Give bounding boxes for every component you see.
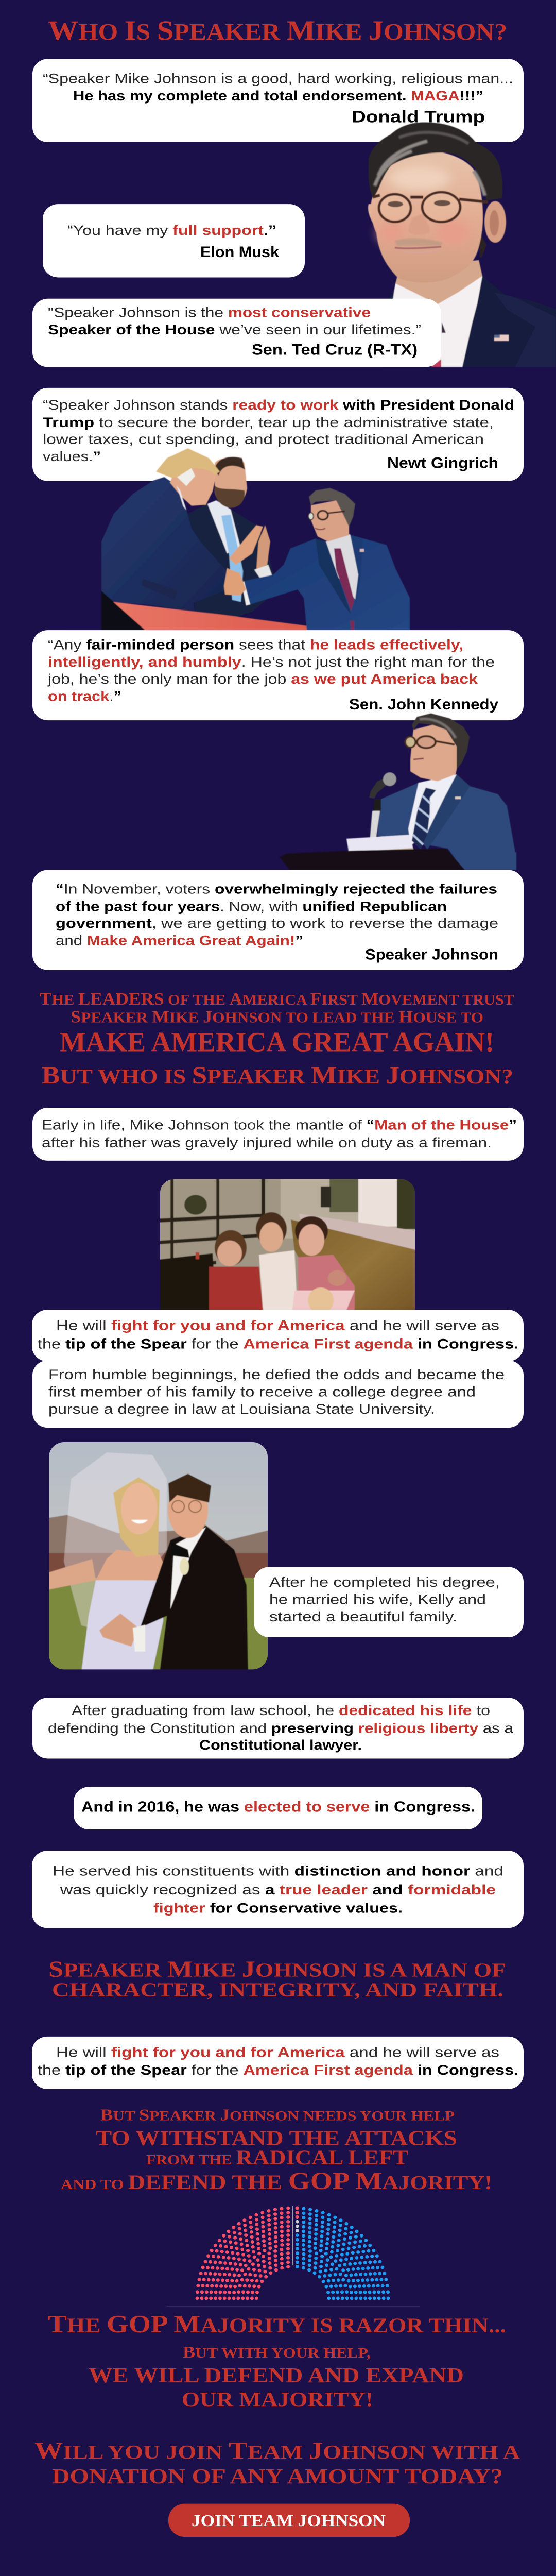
- heading: man of character: CHARACTER, INTEGRITY, AND FAITH.: [52, 1978, 503, 2001]
- button: join team johnson: [168, 2504, 410, 2537]
- panel: Ted Cruz quote: [32, 299, 441, 367]
- panel: fight for you text repeated: [32, 2037, 524, 2089]
- panel: law school text: [32, 1698, 524, 1758]
- heading: leaders of the America First Movement: BUT WHO IS SPEAKER MIKE JOHNSON?: [42, 1061, 513, 1089]
- heading: majority is razor thin: BUT WITH YOUR HELP,: [183, 2344, 371, 2362]
- panel: fight for you text: He will fight for you and for America and he will serve as: [56, 1317, 499, 1333]
- panel: Donald Trump quote: “Speaker Mike Johnson is a good, hard working, religious man...: [43, 71, 513, 86]
- panel: Sen. John Kennedy quote: intelligently, and humbly . He’s not just the right man for the: [48, 654, 495, 670]
- photo: Speaker Johnson portrait: [368, 122, 556, 367]
- photo: childhood family: [160, 1179, 415, 1310]
- panel: Ted Cruz quote: Speaker of the House we’ve seen in our lifetimes.”: [48, 322, 421, 337]
- panel: Speaker Johnson quote: government , we are getting to work to reverse the damage: [56, 915, 498, 931]
- panel: Speaker Johnson quote: Speaker Johnson: [365, 946, 498, 963]
- panel: Newt Gingrich quote: lower taxes, cut spending, and protect traditional American: [43, 431, 484, 447]
- panel: Donald Trump quote: Donald Trump: [352, 108, 485, 126]
- panel: Ted Cruz quote: Sen. Ted Cruz (R-TX): [252, 341, 418, 358]
- heading: leaders of the America First Movement: THE LEADERS OF THE AMERICA FIRST MOVEMENT TRUST: [40, 990, 514, 1009]
- panel: fight for you text repeated: the tip of the Spear for the America First agenda in Congress.: [38, 2062, 518, 2078]
- heading: majority is razor thin: WE WILL DEFEND AND EXPAND: [89, 2364, 464, 2387]
- heading: majority is razor thin: THE GOP M AJORITY IS RAZOR THIN...: [48, 2310, 506, 2338]
- panel: humble beginnings text: [32, 1360, 524, 1428]
- photo: wedding: [46, 1439, 271, 1672]
- panel: Newt Gingrich quote: “Speaker Johnson stands ready to work with President Donald: [43, 397, 514, 413]
- panel: Speaker Johnson quote: [32, 870, 524, 970]
- panel: elected in 2016 text: [74, 1787, 482, 1829]
- heading: needs your help: [61, 2106, 492, 2195]
- panel: Newt Gingrich quote: Trump to secure the border, tear up the administrative state,: [43, 414, 494, 430]
- panel: served constituents text: fighter for Conservative values.: [153, 1900, 403, 1916]
- heading: man of character: [48, 1956, 506, 2001]
- photo: Speaker Johnson at the podium: [280, 714, 516, 870]
- panel: Speaker Johnson quote: of the past four years . Now, with unified Republican: [56, 899, 447, 914]
- panel: Sen. John Kennedy quote: “Any fair-minded person sees that he leads effectively,: [48, 637, 463, 652]
- title: WHO IS SPEAKER MIKE JOHNSON?: [48, 15, 507, 46]
- panel: family text: started a beautiful family.: [269, 1609, 457, 1624]
- heading: leaders of the America First Movement: SPEAKER MIKE JOHNSON TO LEAD THE HOUSE TO: [71, 1007, 483, 1026]
- panel: humble beginnings text: first member of his family to receive a college degree and: [48, 1384, 476, 1399]
- panel: law school text: defending the Constitution and preserving religious liberty as a: [48, 1720, 514, 1736]
- panel: Sen. John Kennedy quote: job, he’s the only man for the job as we put America back: [47, 671, 478, 687]
- panel: family text: After he completed his degree,: [269, 1574, 500, 1590]
- panel: Newt Gingrich quote: Newt Gingrich: [387, 454, 498, 472]
- panel: Newt Gingrich quote: [32, 388, 524, 481]
- panel: fight for you text repeated: He will fight for you and for America and he will serve as: [56, 2044, 499, 2060]
- panel: Newt Gingrich quote: values. ”: [43, 449, 101, 464]
- panel: Elon Musk quote: [43, 204, 305, 277]
- panel: Donald Trump quote: [32, 59, 524, 142]
- heading: needs your help: TO WITHSTAND THE ATTACKS: [96, 2126, 457, 2150]
- panel: elected in 2016 text: And in 2016, he was elected to serve in Congress.: [81, 1799, 475, 1815]
- panel: family text: he married his wife, Kelly and: [269, 1591, 486, 1607]
- chart: House seats semicircle: [167, 2206, 420, 2307]
- heading: needs your help: FROM THE RADICAL LEFT: [146, 2146, 408, 2169]
- panel: served constituents text: He served his constituents with distinction and honor and: [53, 1863, 503, 1878]
- panel: Sen. John Kennedy quote: Sen. John Kennedy: [349, 696, 498, 713]
- photo: Trump, Vance and Johnson handshake: [101, 448, 410, 630]
- heading: man of character: SPEAKER MIKE JOHNSON IS A MAN OF: [48, 1956, 506, 1981]
- panel: Sen. John Kennedy quote: on track .”: [48, 688, 121, 704]
- heading: needs your help: AND TO DEFEND THE GOP M AJORITY!: [61, 2167, 492, 2195]
- panel: early life text: [32, 1108, 524, 1161]
- panel: Speaker Johnson quote: “In November, voters overwhelmingly rejected the failures: [56, 881, 497, 896]
- panel: Elon Musk quote: “You have my full support .”: [67, 222, 276, 238]
- panel: served constituents text: [32, 1851, 524, 1928]
- heading: join call to action: [34, 2438, 520, 2488]
- panel: early life text: Early in life, Mike Johnson took the mantle of “Man of the House ”: [42, 1117, 517, 1132]
- panel: Sen. John Kennedy quote: [32, 630, 524, 720]
- heading: needs your help: BUT SPEAKER JOHNSON NEEDS YOUR HELP: [100, 2106, 455, 2124]
- heading: join call to action: DONATION OF ANY AMOUNT TODAY?: [52, 2465, 503, 2488]
- button: join team johnson: JOIN TEAM JOHNSON: [192, 2512, 386, 2530]
- panel: Elon Musk quote: Elon Musk: [200, 244, 279, 261]
- heading: majority is razor thin: OUR MAJORITY!: [182, 2388, 373, 2412]
- panel: law school text: Constitutional lawyer.: [199, 1737, 362, 1753]
- heading: join call to action: WILL YOU JOIN TEAM JOHNSON WITH A: [34, 2438, 520, 2464]
- panel: fight for you text: [32, 1310, 524, 1361]
- panel: humble beginnings text: pursue a degree in law at Louisiana State University.: [48, 1401, 435, 1417]
- panel: family text: [254, 1567, 524, 1637]
- panel: law school text: After graduating from law school, he dedicated his life to: [72, 1702, 490, 1718]
- panel: served constituents text: was quickly recognized as a true leader and formidable: [60, 1882, 496, 1897]
- panel: Speaker Johnson quote: and Make America Great Again! ”: [56, 933, 303, 948]
- panel: fight for you text: the tip of the Spear for the America First agenda in Congress.: [38, 1336, 518, 1351]
- panel: early life text: after his father was gravely injured while on duty as a fireman.: [42, 1134, 492, 1150]
- heading: leaders of the America First Movement: [40, 990, 514, 1089]
- heading: majority is razor thin: [48, 2310, 506, 2412]
- heading: leaders of the America First Movement: MAKE AMERICA GREAT AGAIN!: [60, 1026, 494, 1057]
- panel: Ted Cruz quote: "Speaker Johnson is the most conservative: [48, 304, 371, 320]
- panel: Donald Trump quote: He has my complete and total endorsement. MAGA !!!”: [73, 88, 483, 104]
- panel: humble beginnings text: From humble beginnings, he defied the odds and became the: [48, 1366, 505, 1382]
